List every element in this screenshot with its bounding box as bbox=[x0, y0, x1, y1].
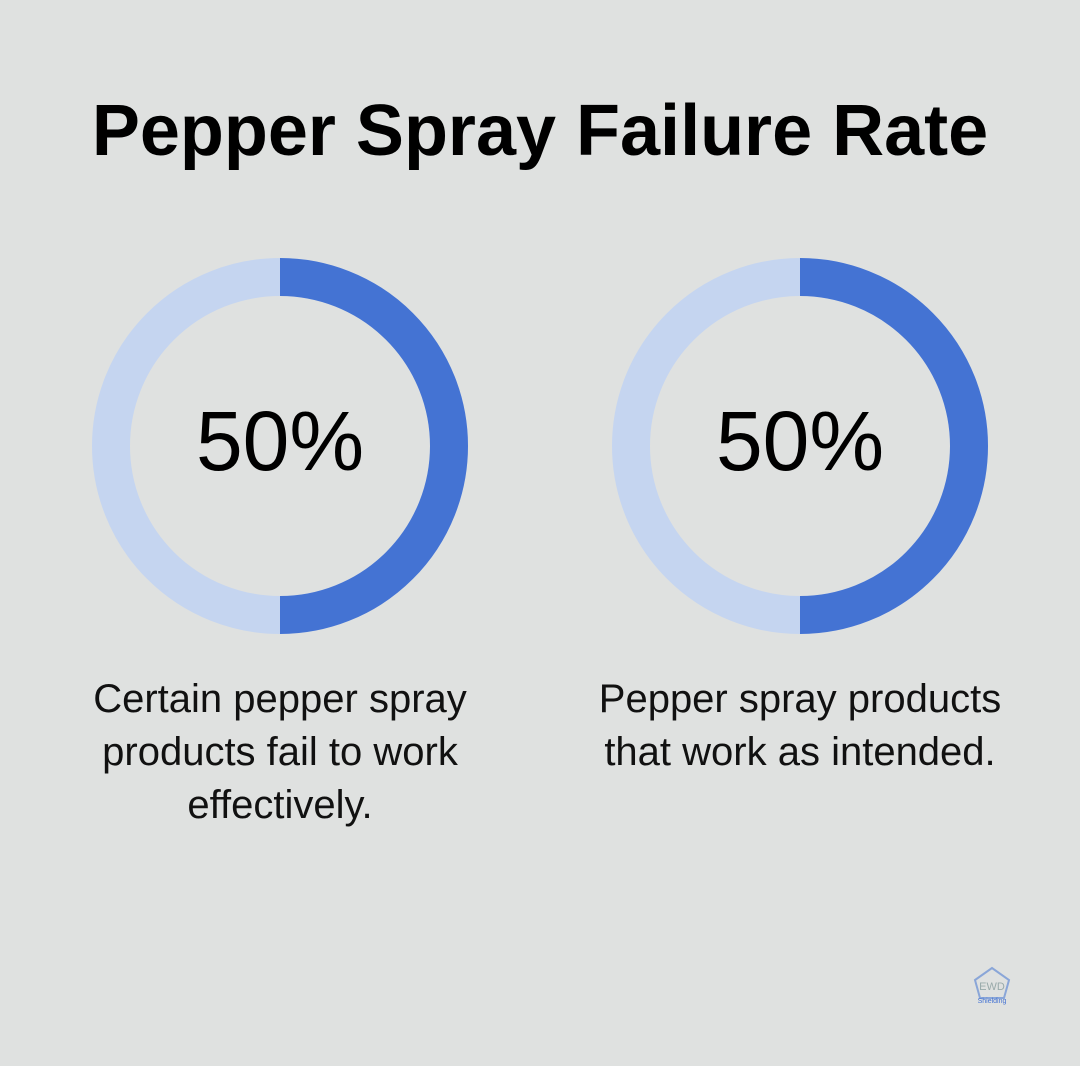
logo bbox=[975, 968, 1009, 1005]
title: Pepper Spray Failure Rate bbox=[92, 91, 988, 171]
donut: left 50%: 50% bbox=[196, 394, 364, 488]
donut: right 50% bbox=[631, 277, 969, 615]
caption right: Pepper spray products that work as intended. bbox=[599, 677, 1001, 774]
donut: left 50% bbox=[111, 277, 449, 615]
logo: Shielding bbox=[978, 998, 1007, 1005]
logo: EWD bbox=[979, 981, 1005, 993]
caption left: Certain pepper spray products fail to work effectively. bbox=[93, 677, 467, 827]
donut: right 50%: 50% bbox=[716, 394, 884, 488]
